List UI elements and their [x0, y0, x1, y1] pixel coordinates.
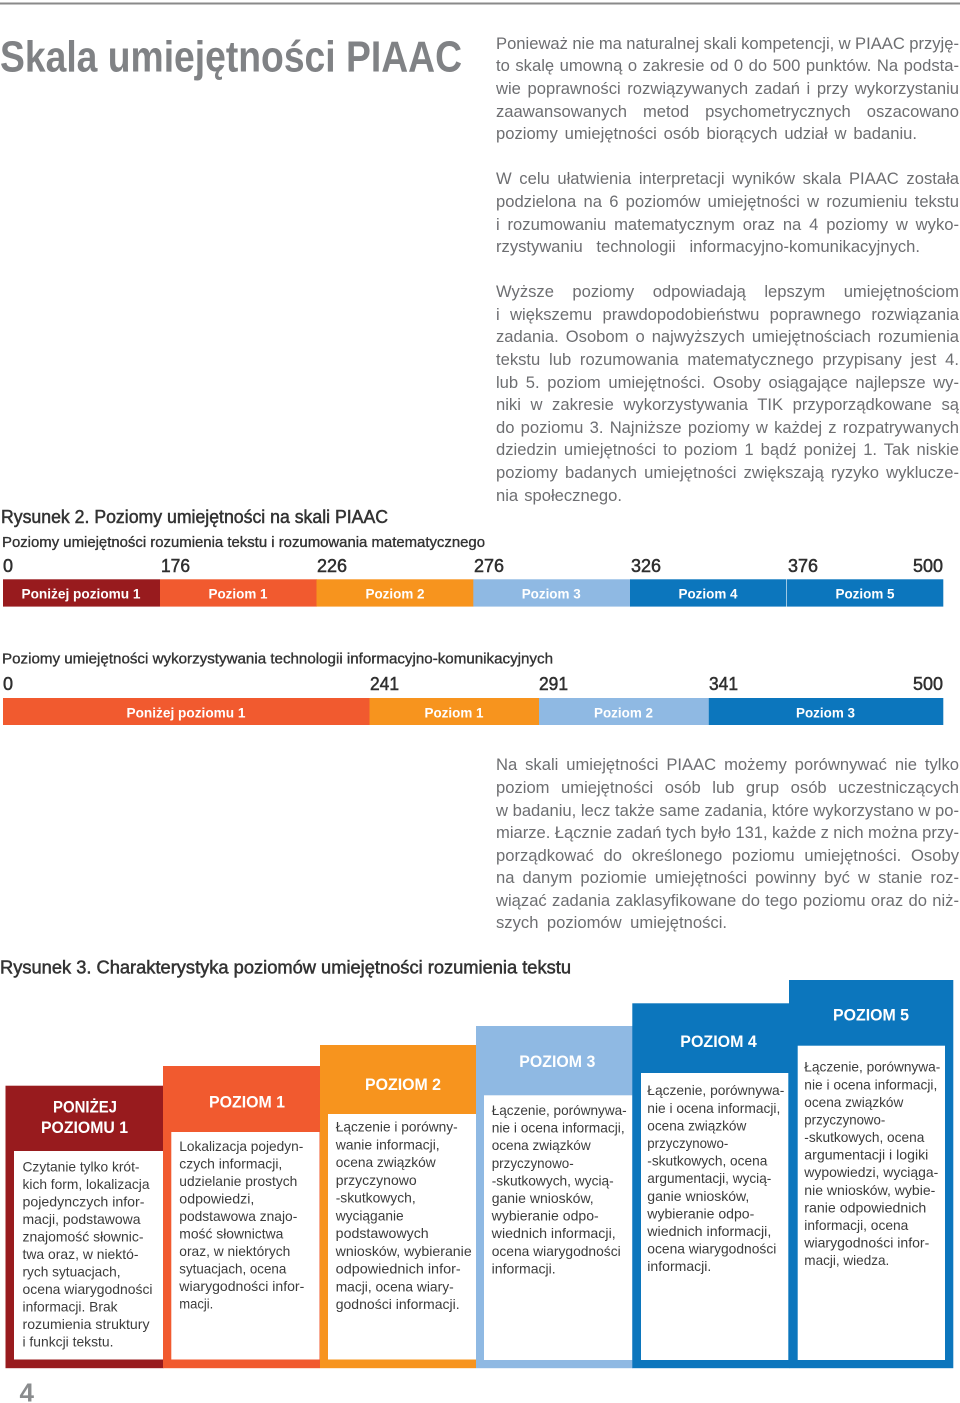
text block: levels paragraph: i rozumowaniu matematycznym oraz na 4 poziomy w wyko- [496, 214, 959, 234]
description [178, 1138, 305, 1312]
description: ganie wniosków, [647, 1188, 749, 1204]
description: pojedynczych infor- [22, 1194, 145, 1210]
panel: level 3 [476, 1026, 633, 1368]
description: znajomość słownic- [22, 1229, 144, 1245]
description: odpowiednich infor- [336, 1260, 461, 1276]
description [646, 1082, 785, 1274]
description: sytuacjach, ocena [179, 1261, 286, 1277]
description: rozumienia struktury [22, 1316, 150, 1332]
scale values [3, 556, 943, 576]
chart subtitle: Poziomy umiejętności wykorzystywania technologii informacyjno-komunikacyjnych [2, 650, 553, 668]
description: przyczynowo- [804, 1112, 886, 1128]
scale values: 226 [317, 556, 347, 576]
scale values: 500 [913, 556, 943, 576]
description: macji, podstawowa [22, 1211, 141, 1227]
scale values: 241 [370, 674, 399, 694]
text block: comparison paragraph: w badaniu, lecz także same zadania, które wykorzystano w po- [496, 800, 959, 820]
description: wypowiedzi, wyciąga- [803, 1164, 939, 1180]
figure 2 heading: Rysunek 2. Poziomy umiejętności na skali PIAAC [1, 507, 388, 527]
description: informacji. [647, 1258, 711, 1274]
scale values: 291 [539, 674, 568, 694]
text block: intro paragraph: to skalę umowną o zakresie od 0 do 500 punktów. Na podsta- [496, 56, 959, 75]
description: nie wniosków, wybie- [804, 1182, 936, 1198]
heading: POZIOM 2 [365, 1075, 441, 1094]
description: ocena wiarygodności [492, 1243, 621, 1259]
description [22, 1159, 152, 1350]
figure 3 heading: Rysunek 3. Charakterystyka poziomów umiejętności rozumienia tekstu [0, 958, 571, 978]
description: nie i ocena informacji, [804, 1076, 937, 1092]
text block: comparison paragraph: szych poziomów umiejętności. [496, 913, 727, 932]
description: czych informacji, [179, 1156, 282, 1172]
heading: POZIOM 3 [519, 1052, 595, 1071]
text block: higher levels paragraph: tekstu lub rozumowania matematycznego przypisany jest 4. [496, 350, 959, 369]
description: informacji. [492, 1260, 556, 1276]
title: Skala umiejętności PIAAC [0, 34, 462, 82]
description: ganie wniosków, [492, 1190, 594, 1206]
description: przyczynowo- [647, 1135, 729, 1151]
segmented bar: Poziom 3 [796, 704, 855, 720]
description: argumentacji, wycią- [647, 1170, 772, 1186]
description: odpowiedzi, [179, 1191, 254, 1207]
text block: levels paragraph: rzystywaniu technologii informacyjno-komunikacyjnych. [496, 237, 920, 256]
segmented bar [3, 698, 943, 725]
description: ocena wiarygodności [22, 1281, 152, 1297]
panel: level 4 [632, 1003, 789, 1368]
heading: POZIOM 1 [209, 1093, 285, 1112]
description: przyczynowo [336, 1172, 417, 1188]
description: Czytanie tylko krót- [22, 1159, 140, 1175]
chart: ICT levels scale [2, 650, 943, 725]
description: nie i ocena informacji, [492, 1120, 625, 1136]
heading [41, 1098, 128, 1137]
scale values: 326 [631, 556, 661, 576]
text block: comparison paragraph [496, 755, 959, 932]
description: macji, ocena wiary- [336, 1278, 454, 1294]
segmented bar [3, 579, 943, 607]
text block: levels paragraph: podzielona na 6 poziomów umiejętności w rozumieniu tekstu [496, 192, 959, 211]
text block: intro paragraph [496, 34, 959, 143]
scale values: 176 [161, 556, 190, 576]
segmented bar: Poziom 1 [208, 586, 268, 602]
panel: level 5 [789, 980, 953, 1368]
description: argumentacji i logiki [804, 1147, 928, 1163]
heading: POZIOM 4 [680, 1032, 757, 1051]
panel: level 1 [163, 1066, 320, 1368]
text block: levels paragraph [496, 169, 959, 256]
segmented bar: Poziom 4 [678, 586, 738, 602]
text block: comparison paragraph: poziom umiejętności osób lub grup osób uczestniczących [496, 778, 959, 797]
description: i funkcji tekstu. [22, 1334, 114, 1350]
text block: higher levels paragraph: i większemu prawdopodobieństwu poprawnego rozwiązania [496, 305, 959, 324]
description: -skutkowych, [336, 1190, 416, 1206]
heading: PONIŻEJ [53, 1098, 117, 1117]
description: kich form, lokalizacja [22, 1176, 150, 1192]
text block: higher levels paragraph: do poziomu 3. Najniższe poziomy w każdej z rozpatrywanych [496, 418, 959, 437]
text block: higher levels paragraph: niki w zakresie wykorzystywania TIK przyporządkowane są [496, 395, 959, 414]
description: -skutkowych, wycią- [492, 1172, 614, 1188]
text block: higher levels paragraph: lub 5. poziom umiejętności. Osoby osiągające najlepsze wy- [496, 373, 959, 392]
description: Łączenie, porównywa- [492, 1102, 627, 1118]
description: wniosków, wybieranie [335, 1243, 472, 1259]
segmented bar: Poziom 2 [594, 704, 653, 720]
text block: higher levels paragraph: zadania. Osobom o najwyższych umiejętnościach rozumienia [496, 327, 959, 346]
text block: higher levels paragraph: Wyższe poziomy odpowiadają lepszym umiejętnościom [496, 282, 959, 301]
panel: level 2 [320, 1045, 476, 1368]
description: wiarygodności infor- [803, 1234, 930, 1250]
text block: comparison paragraph: na danym poziomie umiejętności powinny być w stanie roz- [496, 868, 959, 887]
description: Lokalizacja pojedyn- [179, 1138, 304, 1154]
chart: literacy and numeracy levels scale [2, 534, 943, 607]
scale values: 500 [913, 674, 943, 694]
scale values [3, 674, 943, 694]
description: wyciąganie [335, 1207, 404, 1223]
text block: comparison paragraph: wiązać zadania zaklasyfikowane do tego poziomu oraz do niż- [496, 891, 959, 910]
description: Łączenie, porównywa- [804, 1059, 941, 1075]
description: wanie informacji, [335, 1136, 440, 1152]
text block: comparison paragraph: porządkować do określonego poziomu umiejętności. Osoby [496, 846, 959, 865]
description: ocena związków [804, 1094, 904, 1110]
scale values: 341 [709, 674, 738, 694]
segmented bar: Poziom 1 [424, 704, 484, 720]
description: ocena wiarygodności [647, 1241, 776, 1257]
segmented bar: Poniżej poziomu 1 [22, 586, 141, 602]
description: godności informacji. [336, 1296, 460, 1312]
description: mość słownictwa [179, 1226, 284, 1242]
text block: higher levels paragraph [496, 282, 959, 505]
description: -skutkowych, ocena [804, 1129, 925, 1145]
description: Łączenie, porównywa- [647, 1082, 785, 1098]
description [491, 1102, 627, 1276]
text block: higher levels paragraph: nia społecznego. [496, 486, 622, 505]
description: Łączenie i porówny- [336, 1118, 458, 1134]
panel: below level 1 [6, 1086, 164, 1368]
description: wybieranie odpo- [491, 1208, 599, 1224]
scale values: 276 [474, 556, 504, 576]
segmented bar: Poniżej poziomu 1 [126, 704, 246, 720]
scale values: 0 [3, 556, 13, 576]
description: -skutkowych, ocena [647, 1153, 768, 1169]
text block: higher levels paragraph: dziedzin umiejętności to poziom 1 bądź poniżej 1. Tak niskie [496, 440, 959, 459]
segmented bar: Poziom 3 [522, 586, 581, 602]
description: ocena związków [336, 1154, 437, 1170]
text block: intro paragraph: Ponieważ nie ma naturalnej skali kompetencji, w PIAAC przyję- [496, 34, 959, 53]
text block: comparison paragraph: Na skali umiejętności PIAAC możemy porównywać nie tylko [496, 755, 959, 774]
description: udzielanie prostych [179, 1173, 297, 1189]
text block: levels paragraph: W celu ułatwienia interpretacji wyników skala PIAAC została [496, 169, 959, 188]
description [335, 1118, 472, 1312]
text block: higher levels paragraph: poziomy badanych umiejętności zwiększają ryzyko wyklucze- [496, 463, 959, 482]
description: wiednich informacji, [491, 1225, 616, 1241]
description: wybieranie odpo- [646, 1205, 755, 1221]
scale values: 0 [3, 674, 13, 694]
description: nie i ocena informacji, [647, 1100, 780, 1116]
description: macji, wiedza. [804, 1252, 889, 1268]
heading: POZIOM 5 [833, 1006, 909, 1024]
text block: intro paragraph: wie poprawności rozwiązywanych zadań i przy wykorzystaniu [496, 79, 959, 98]
description: podstawowa znajo- [179, 1208, 298, 1224]
description: ocena związków [647, 1117, 747, 1133]
scale values: 376 [788, 556, 818, 576]
text block: intro paragraph: poziomy umiejętności osób biorących udział w badaniu. [496, 124, 917, 143]
description: podstawowych [336, 1225, 429, 1241]
chart subtitle: Poziomy umiejętności rozumienia tekstu i rozumowania matematycznego [2, 534, 485, 551]
text block: intro paragraph: zaawansowanych metod psychometrycznych oszacowano [496, 102, 959, 120]
segmented bar: Poziom 5 [836, 586, 895, 602]
description: ocena związków [492, 1137, 592, 1153]
description: wiarygodności infor- [178, 1278, 305, 1294]
description: oraz, w niektórych [179, 1243, 290, 1259]
description: ranie odpowiednich [804, 1199, 926, 1215]
description: wiednich informacji, [646, 1223, 771, 1239]
segmented bar: Poziom 2 [366, 586, 425, 602]
description: rych sytuacjach, [22, 1264, 120, 1280]
heading: POZIOMU 1 [41, 1118, 128, 1137]
description: twa oraz, w niektó- [22, 1246, 139, 1262]
description: informacji, ocena [804, 1217, 909, 1233]
description: macji. [179, 1296, 213, 1312]
description: informacji. Brak [22, 1299, 118, 1315]
description [803, 1059, 941, 1268]
description: przyczynowo- [492, 1155, 574, 1171]
text block: comparison paragraph: miarze. Łącznie zadań tych było 131, każde z nich można przy- [496, 823, 959, 842]
